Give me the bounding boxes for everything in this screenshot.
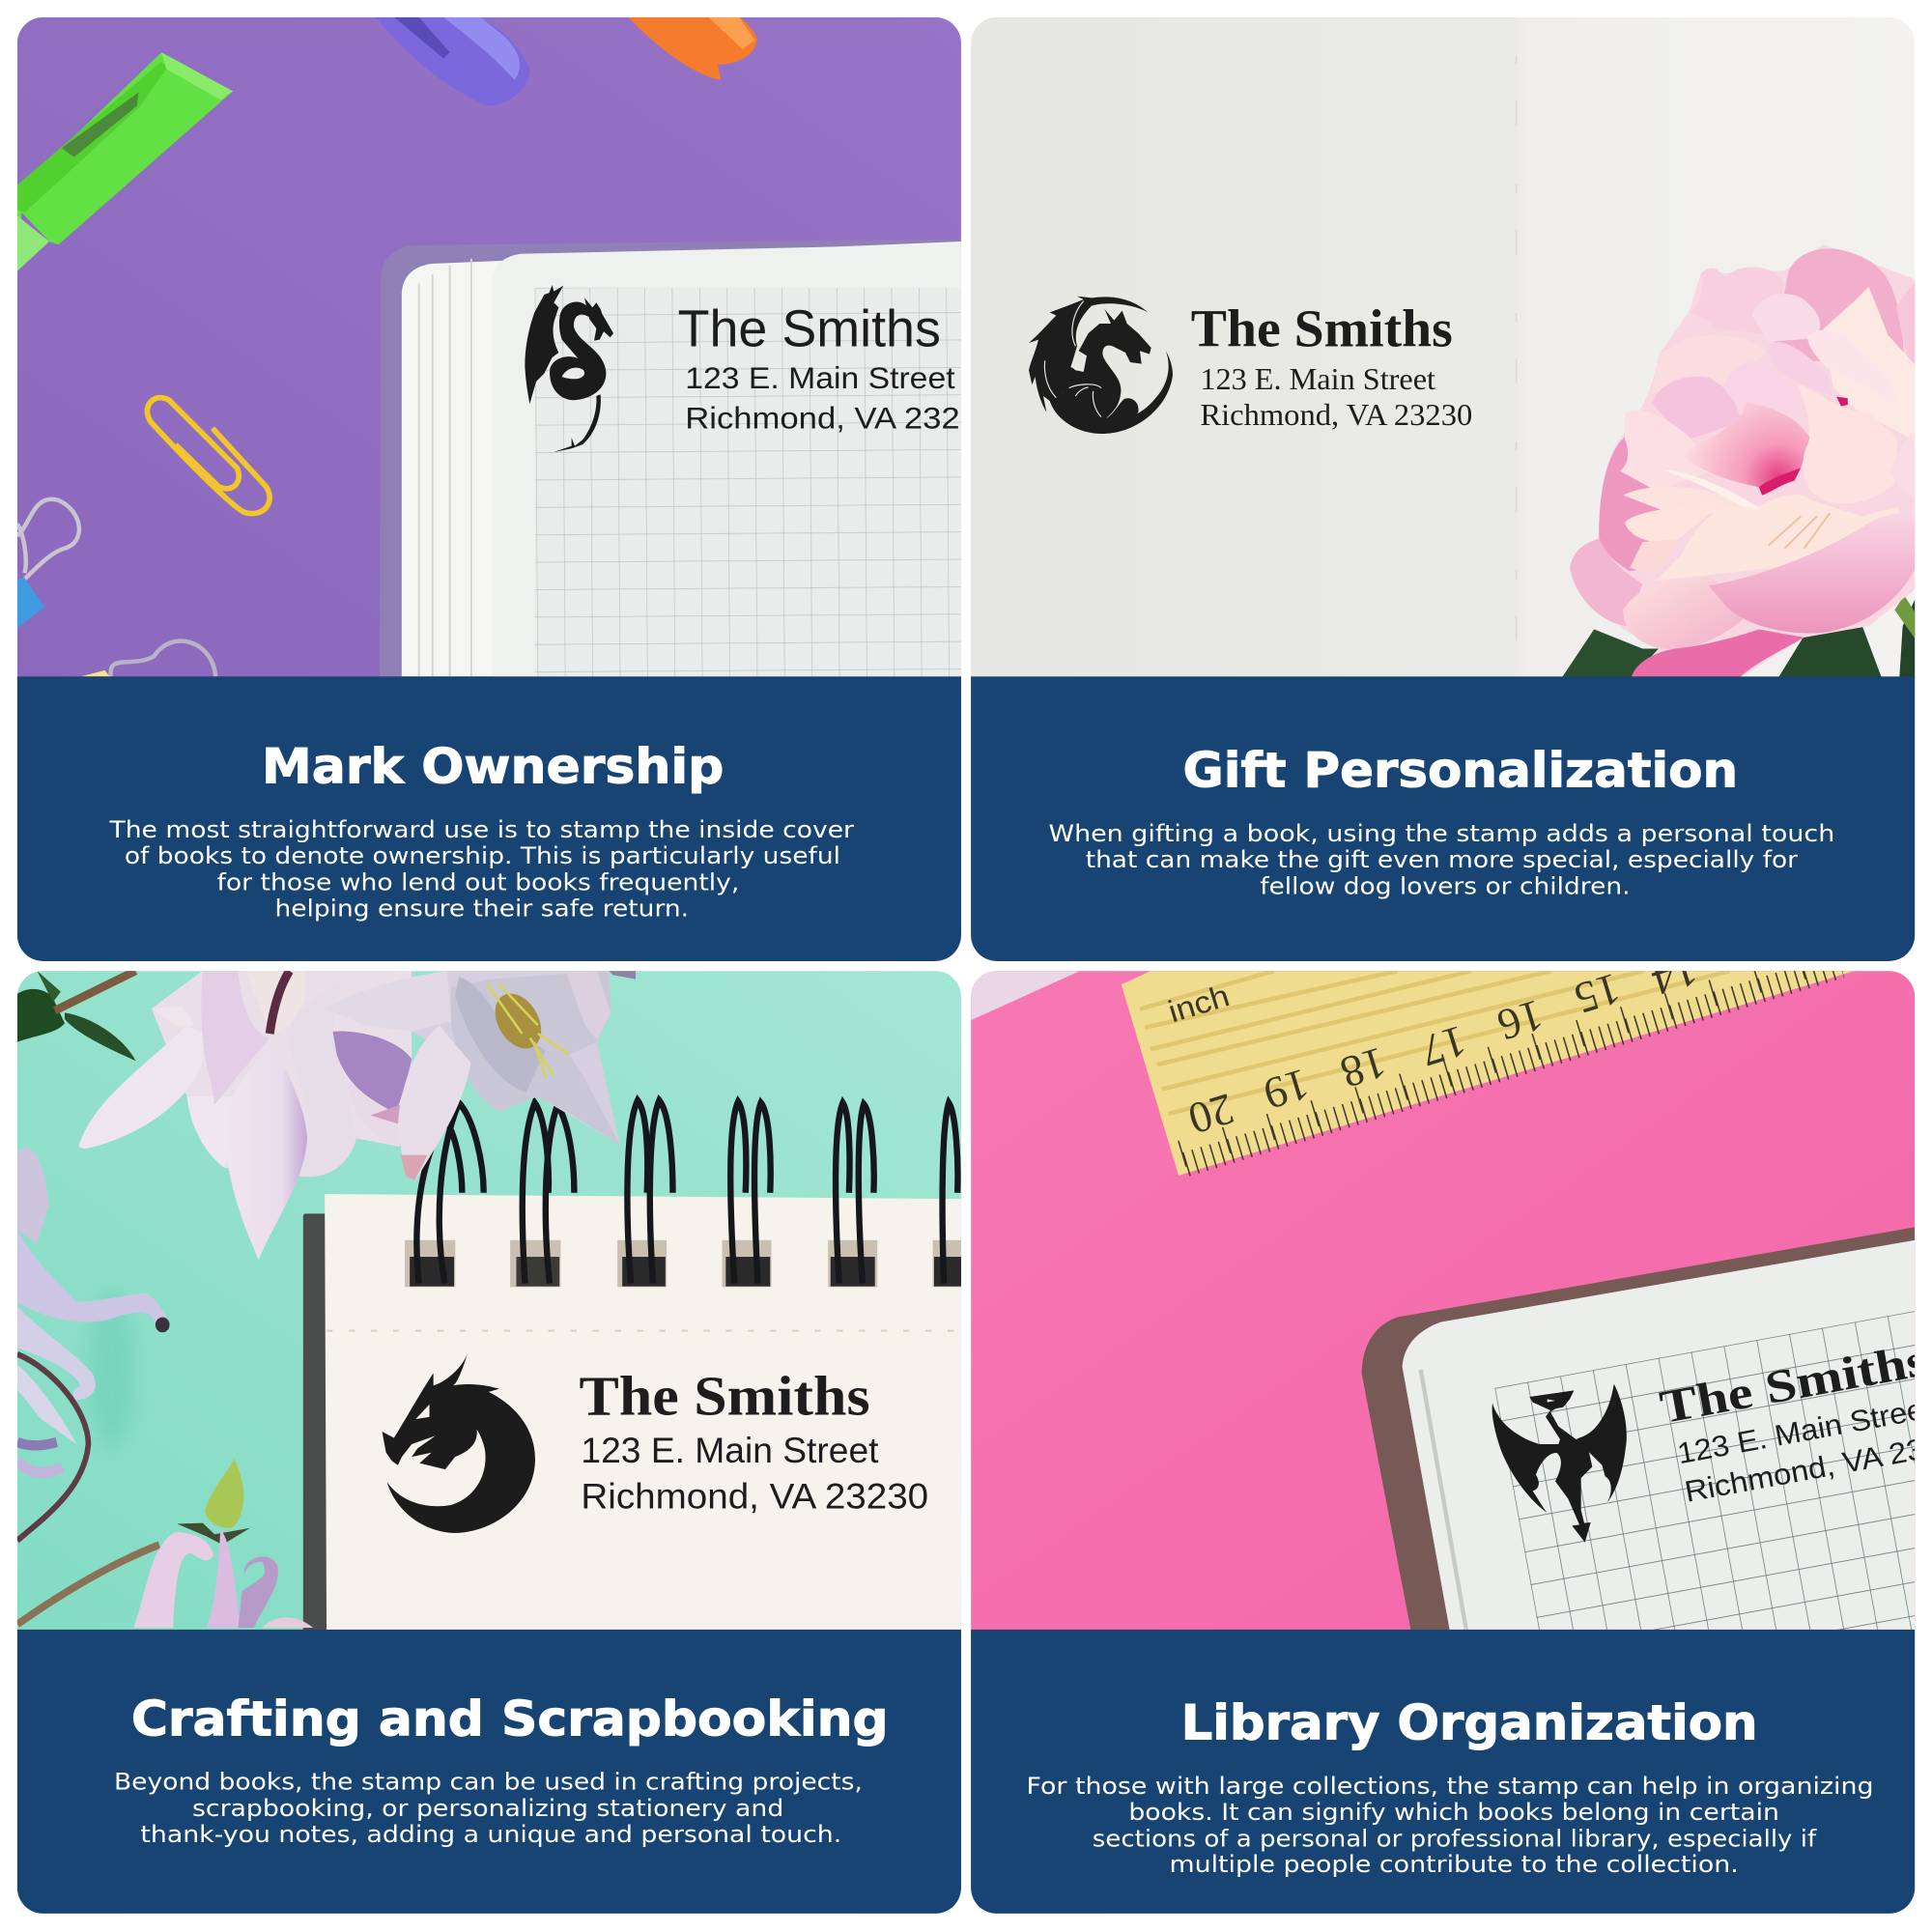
caption background [0, 1630, 985, 1925]
stamp text: rotated address: 123 E. Main Street [1675, 1391, 1932, 1470]
notebook cover and page [1361, 1227, 1915, 1631]
caption background [966, 1630, 1932, 1925]
text block: crafting description: scrapbooking, or personalizing stationery and [192, 1795, 783, 1822]
photo: pink desk with ruler and notebook [971, 946, 1932, 1631]
icon: crescent dragon stamp [383, 1353, 535, 1533]
caption background [966, 676, 1932, 972]
icon: wooden ruler: 19 [1258, 1060, 1315, 1120]
text block: mark ownership description: The most straightforward use is to stamp the inside cover [108, 816, 854, 843]
stamp text: blackletter address [580, 1364, 928, 1516]
icon: green highlighter [17, 52, 233, 271]
stamp text: blackletter address: Richmond, VA 23230 [581, 1476, 928, 1516]
stamp text: serif address: Richmond, VA 232 [685, 400, 960, 435]
caption background [0, 676, 985, 972]
heading: Crafting and Scrapbooking: Crafting and Scrapbooking [131, 1691, 889, 1747]
text block: mark ownership description [108, 816, 854, 922]
panel: gift personalization [966, 17, 1932, 972]
icon: orange pen clip [629, 17, 756, 80]
heading: Mark Ownership: Mark Ownership [262, 739, 724, 795]
panel: library organization [966, 946, 1932, 1925]
icon: wooden ruler: 16 [1492, 990, 1548, 1050]
stamp text: blackletter address: The Smiths [580, 1364, 870, 1427]
stamp text: decorative address [1191, 298, 1472, 432]
icon: serpent dragon stamp [525, 285, 613, 452]
text block: library organization description: sections of a personal or professional library, especially if [1093, 1825, 1817, 1852]
text block: library organization description: books. It can signify which books belong in certain [1128, 1799, 1779, 1826]
heading: Gift Personalization: Gift Personalization [1183, 742, 1738, 798]
text block: crafting description: thank-you notes, adding a unique and personal touch. [140, 1821, 841, 1848]
icon: wooden ruler: inch [1164, 978, 1234, 1029]
photo: teal desk with spiral notebook [17, 971, 964, 1633]
icon: wooden ruler: 14 [1646, 946, 1703, 1006]
stamp text: rotated address [1659, 1350, 1915, 1501]
text block: mark ownership description: of books to denote ownership. This is particularly useful [125, 842, 840, 869]
icon: wooden ruler [1121, 971, 1855, 1177]
heading: Library Organization: Library Organization [1181, 1694, 1758, 1750]
icon: purple pen clip [376, 17, 530, 106]
stamp text: serif address: 123 E. Main Street [685, 360, 955, 395]
text block: crafting description [114, 1769, 863, 1848]
icon: lilac flowers [17, 971, 636, 1628]
text block: mark ownership description: helping ensure their safe return. [274, 895, 689, 922]
notebook cover and pages [380, 239, 961, 676]
text block: mark ownership description: for those who lend out books frequently, [217, 869, 739, 896]
icon: wooden ruler: 17 [1415, 1016, 1472, 1076]
stamp text: decorative address: 123 E. Main Street [1200, 362, 1435, 396]
text block: gift personalization description: that can make the gift even more special, especially for [1086, 846, 1798, 873]
icon: yellow paperclip [147, 398, 270, 514]
icon: wooden ruler: 18 [1335, 1037, 1392, 1098]
notebook cover and page [303, 1194, 961, 1633]
photo: purple desk with notebook [17, 17, 961, 678]
text block: library organization description: For those with large collections, the stamp can help in organizing [1027, 1773, 1873, 1800]
photo: open card with peony [971, 17, 1918, 678]
text block: gift personalization description: When gifting a book, using the stamp adds a personal touch [1048, 820, 1834, 847]
icon: binder clips [17, 499, 215, 676]
panel: crafting and scrapbooking [0, 971, 985, 1925]
stamp text: decorative address: Richmond, VA 23230 [1200, 398, 1472, 432]
icon: winged dragon stamp [1492, 1384, 1627, 1543]
stamp text: decorative address: The Smiths [1191, 298, 1453, 357]
icon: wooden ruler: 20 [1182, 1084, 1239, 1144]
icon: wooden ruler: 15 [1569, 964, 1626, 1024]
icon: circular dragon stamp [1029, 297, 1173, 434]
text block: gift personalization description [1048, 820, 1834, 899]
text block: gift personalization description: fellow dog lovers or children. [1260, 872, 1631, 899]
panel: mark ownership [0, 17, 985, 972]
stamp text: blackletter address: 123 E. Main Street [581, 1431, 879, 1470]
stamp text: rotated address: The Smiths [1656, 1334, 1932, 1434]
text block: library organization description [1027, 1773, 1873, 1878]
icon: binding holes [405, 1240, 964, 1287]
icon: spiral rings [416, 1100, 957, 1283]
stamp text: serif address [678, 300, 960, 435]
text block: library organization description: multiple people contribute to the collection. [1169, 1851, 1739, 1878]
stamp text: serif address: The Smiths [678, 300, 941, 357]
icon: peony flower [1562, 244, 1918, 678]
text block: crafting description: Beyond books, the stamp can be used in crafting projects, [114, 1769, 863, 1796]
